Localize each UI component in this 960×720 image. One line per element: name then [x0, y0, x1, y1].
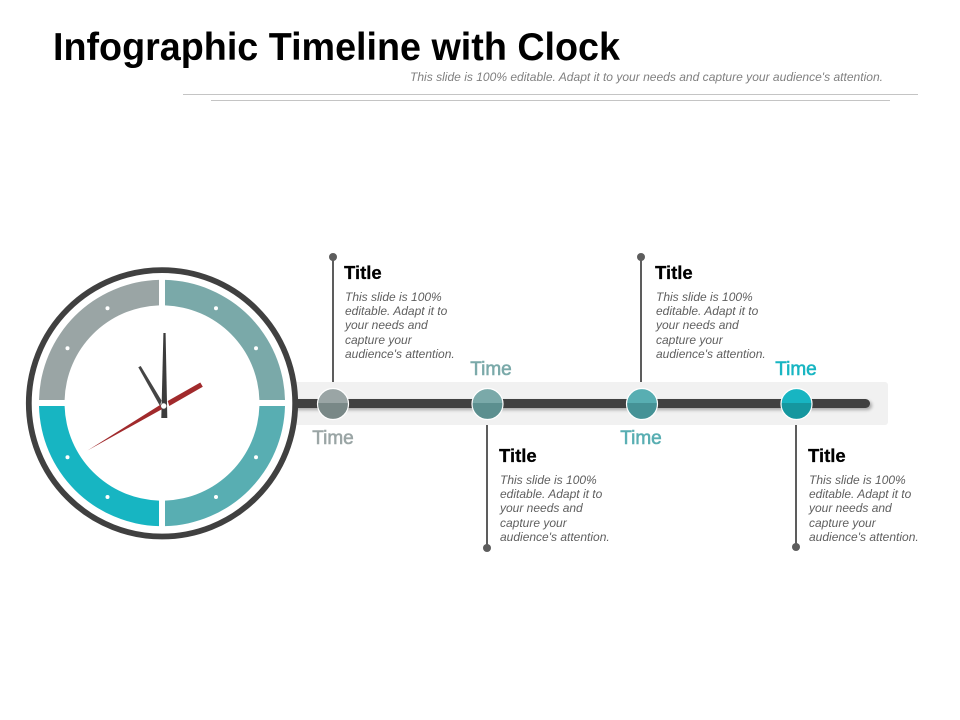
timeline band [290, 382, 888, 425]
connector [329, 253, 337, 382]
description: audience's attention. [809, 530, 919, 544]
description: editable. Adapt it to [809, 487, 912, 501]
description: your needs and [499, 501, 583, 515]
description: This slide is 100% [656, 290, 753, 304]
description: your needs and [655, 318, 739, 332]
connector [792, 425, 800, 551]
description: editable. Adapt it to [345, 304, 448, 318]
milestone 4 [775, 359, 919, 551]
heading: Title [655, 262, 693, 283]
description: This slide is 100% [809, 473, 906, 487]
hand pivot [161, 403, 167, 409]
connector [483, 425, 491, 552]
heading: Title [808, 445, 846, 466]
time label: Time [470, 359, 512, 380]
node [781, 388, 812, 420]
hand: second [88, 382, 203, 450]
timeline bar [290, 399, 872, 410]
description: capture your [656, 333, 724, 347]
description: editable. Adapt it to [500, 487, 603, 501]
title: Infographic Timeline with Clock [53, 26, 621, 69]
node [626, 388, 658, 420]
description: audience's attention. [345, 347, 455, 361]
hand: hour [138, 366, 162, 406]
hand: minute [161, 333, 167, 418]
description: This slide is 100% [345, 290, 442, 304]
segment: bottom left [39, 406, 159, 526]
time label: Time [312, 428, 354, 449]
node [318, 388, 348, 420]
description: your needs and [344, 318, 428, 332]
time label: Time [775, 359, 817, 380]
connector [637, 253, 645, 382]
segment: top left [39, 280, 159, 400]
milestone 1 [312, 253, 455, 449]
subtitle: This slide is 100% editable. Adapt it to your needs and capture your audience's attention. [410, 70, 883, 84]
description: capture your [809, 516, 877, 530]
heading: Title [499, 445, 537, 466]
description: audience's attention. [500, 530, 610, 544]
segment: top right [165, 280, 285, 400]
hour dots [66, 306, 258, 499]
description: audience's attention. [656, 347, 766, 361]
description: editable. Adapt it to [656, 304, 759, 318]
description: capture your [500, 516, 568, 530]
description: your needs and [808, 501, 892, 515]
description: This slide is 100% [500, 473, 597, 487]
clock [29, 270, 295, 536]
milestone 2 [470, 359, 610, 552]
milestone 3 [620, 253, 766, 449]
time label: Time [620, 428, 662, 449]
heading: Title [344, 262, 382, 283]
description: capture your [345, 333, 413, 347]
clock ring [29, 270, 295, 536]
segment: bottom right [165, 406, 285, 526]
node [472, 388, 503, 420]
